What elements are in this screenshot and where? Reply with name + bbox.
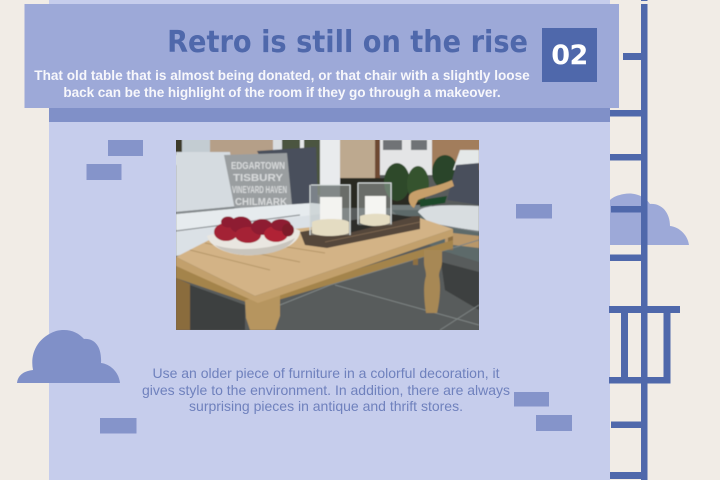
body text — [142, 365, 510, 414]
header strip shadow — [49, 107, 610, 122]
header subtitle — [34, 68, 530, 100]
photo: patio table with apples and candles — [176, 140, 479, 330]
body text: Use an older piece of furniture in a colorful decoration, it — [152, 365, 500, 381]
bricks — [86, 140, 572, 434]
photo: patio table with apples and candles: CHILMARK — [235, 197, 288, 208]
header panel — [24, 4, 619, 108]
title: Retro is still on the rise — [167, 25, 528, 60]
number badge: 02 — [551, 40, 588, 71]
cloud: left — [17, 330, 120, 383]
cloud: right — [610, 193, 689, 245]
panel: building wall — [49, 0, 610, 480]
photo: patio table with apples and candles: VINEYARD HAVEN — [232, 185, 287, 196]
number badge — [542, 28, 597, 82]
body text: surprising pieces in antique and thrift stores. — [189, 398, 463, 414]
header subtitle: That old table that is almost being donated, or that chair with a slightly loose — [34, 68, 530, 83]
header subtitle: back can be the highlight of the room if they go through a makeover. — [63, 85, 501, 100]
photo: patio table with apples and candles: EDGARTOWN — [231, 161, 285, 172]
ladder — [609, 0, 680, 480]
photo: patio table with apples and candles: TISBURY — [233, 173, 283, 184]
body text: gives style to the environment. In addition, there are always — [142, 382, 510, 398]
